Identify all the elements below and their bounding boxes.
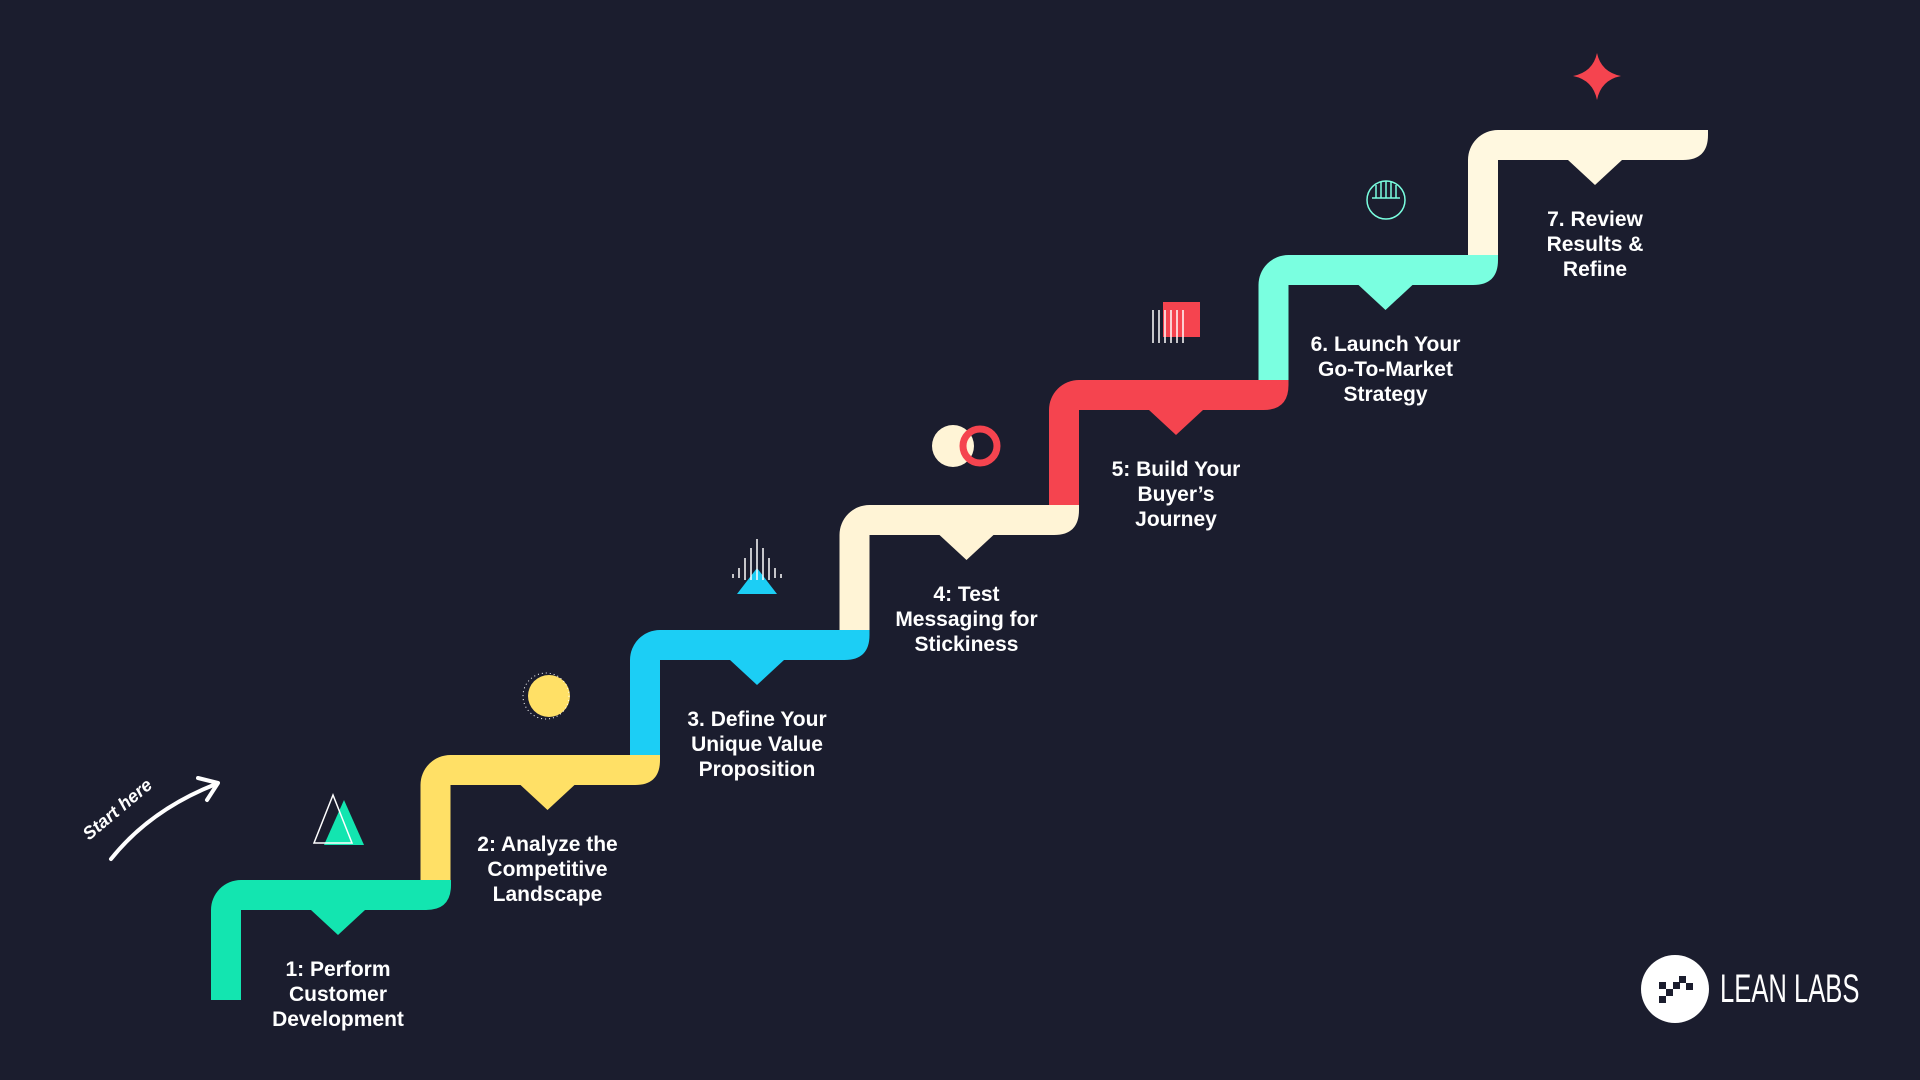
label: step 1: Customer <box>289 983 387 1006</box>
label: step 4: Messaging for <box>895 608 1038 631</box>
label: step 2 <box>477 833 618 906</box>
label: step 5 <box>1112 458 1240 531</box>
label: step 7: 7. Review <box>1547 208 1643 231</box>
icon: overlapping circles <box>932 425 997 467</box>
icon: triangles <box>314 795 364 845</box>
icon: yellow circle <box>523 673 570 719</box>
label: step 7: Results & <box>1547 233 1643 256</box>
step 7 bar <box>1468 130 1708 255</box>
logo icon <box>1641 955 1709 1023</box>
label: step 5: Journey <box>1135 508 1217 531</box>
icon: red star <box>1573 53 1621 100</box>
label: step 3 <box>687 708 827 781</box>
label: step 5: 5: Build Your <box>1112 458 1240 481</box>
icon: blue triangle with lines <box>733 539 781 594</box>
label: step 3: Proposition <box>699 758 815 781</box>
label: step 5: Buyer’s <box>1137 483 1215 506</box>
label: step 1: 1: Perform <box>285 958 391 981</box>
label: step 2: Competitive <box>487 858 608 881</box>
step 1 bar <box>211 880 451 1000</box>
logo: Lean Labs <box>1641 955 1859 1023</box>
label: step 6: Go-To-Market <box>1318 358 1453 381</box>
step 3 bar <box>630 630 870 755</box>
label: step 4 <box>895 583 1038 656</box>
step 2 bar <box>420 755 660 880</box>
icon: red square with lines <box>1153 302 1200 343</box>
step 4 bar <box>840 505 1079 630</box>
step 6 bar <box>1258 255 1498 380</box>
label: step 7 <box>1547 208 1643 281</box>
arrow: start here: Start here <box>79 775 156 844</box>
label: step 3: Unique Value <box>691 733 823 756</box>
label: step 2: 2: Analyze the <box>477 833 618 856</box>
arrow: start here <box>79 775 218 859</box>
label: step 1: Development <box>272 1008 404 1031</box>
step 5 bar <box>1049 380 1288 505</box>
label: step 2: Landscape <box>493 883 602 906</box>
logo text: LEAN LABS <box>1720 967 1859 1011</box>
label: step 4: Stickiness <box>915 633 1018 656</box>
label: step 6: 6. Launch Your <box>1311 333 1460 356</box>
label: step 1 <box>272 958 404 1031</box>
label: step 3: 3. Define Your <box>687 708 827 731</box>
label: step 6 <box>1311 333 1460 406</box>
label: step 7: Refine <box>1563 258 1627 281</box>
label: step 6: Strategy <box>1343 383 1428 406</box>
icon: striped circle <box>1367 181 1405 219</box>
label: step 4: 4: Test <box>933 583 1000 606</box>
